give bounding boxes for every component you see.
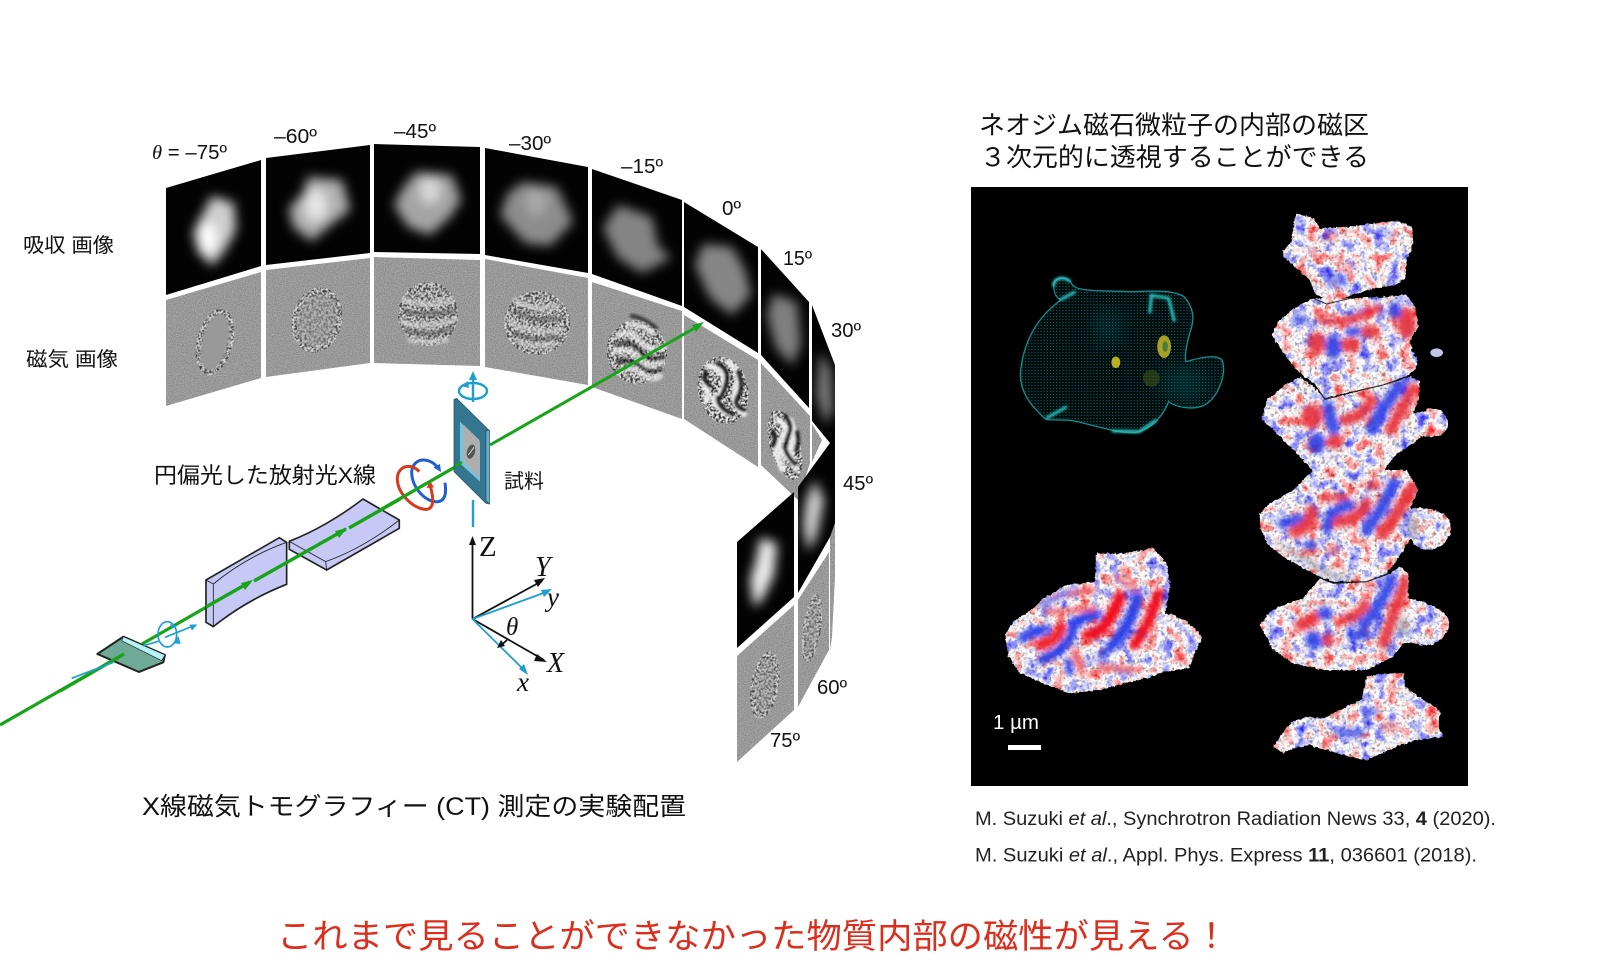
label: -45: –45º (394, 121, 437, 143)
blue helix (412, 460, 446, 502)
label: circularly polarized X-rays: 円偏光した放射光X線 (154, 463, 376, 488)
axis label x: x (516, 667, 529, 697)
absorption image strip (166, 144, 835, 537)
axis label Y: Y (535, 552, 554, 583)
citations (975, 809, 1496, 866)
label: 30: 30º (831, 320, 862, 342)
particle: cut-away view (1005, 548, 1202, 694)
particle: stacked slices (1259, 213, 1451, 760)
label: 60: 60º (817, 677, 848, 699)
sample holder (454, 398, 489, 504)
ball shading (1267, 515, 1418, 637)
label: 15: 15º (783, 248, 813, 270)
magnetic domain stripes (195, 289, 821, 712)
heading line 1: ネオジム磁石微粒子の内部の磁区 (979, 112, 1369, 140)
axis label theta: θ (506, 614, 518, 641)
row label: magnetic image: 磁気 画像 (26, 348, 118, 371)
optic: phase plate mirror (97, 637, 165, 672)
yellow inclusions (1111, 335, 1171, 387)
absorption panels lower (737, 443, 830, 648)
red helix (397, 466, 434, 509)
mirror / monochromator optics (97, 499, 399, 672)
axis label y: y (544, 582, 559, 612)
row label: absorption image: 吸収 画像 (23, 234, 114, 257)
scale label: 1 µm (993, 712, 1039, 734)
label: 45: 45º (843, 473, 874, 495)
axis Z (469, 536, 476, 619)
angle labels (152, 121, 874, 752)
optic: second focusing mirror (289, 499, 399, 570)
magnetic domain speckle (189, 282, 826, 721)
citation 1: M. Suzuki et al., Synchrotron Radiation News 33, 4 (2020). (975, 809, 1496, 830)
conclusion in red: これまで見ることができなかった物質内部の磁性が見える！ (277, 918, 1229, 956)
magnetic image strip (166, 257, 835, 762)
crack seams between slices (1313, 298, 1407, 583)
axis of sample rotation (459, 371, 487, 527)
x-ray beam (0, 322, 704, 725)
label: 75: 75º (770, 730, 801, 752)
scale bar (1008, 745, 1041, 750)
particle: cyan wireframe (1020, 278, 1224, 433)
citation 2: M. Suzuki et al., Appl. Phys. Express 11, 036601 (2018). (975, 846, 1477, 866)
heading: neodymium particle (979, 112, 1369, 172)
domain colours cut-away (1022, 577, 1158, 672)
label: -60: –60º (274, 126, 318, 148)
axis label Z: Z (479, 531, 497, 563)
magnetic panels: gray backgrounds (166, 257, 835, 762)
label: -30: –30º (509, 133, 552, 155)
domain colours lower slices (1282, 480, 1413, 738)
axis x cyan (472, 619, 528, 675)
optic: first focusing mirror (206, 538, 287, 627)
absorption panels: black backgrounds (166, 144, 835, 537)
domain colours upper slices (1292, 229, 1416, 454)
axis Y (472, 578, 545, 619)
label: -15: –15º (621, 156, 664, 178)
heading line 2: ３次元的に透視することができる (980, 144, 1369, 172)
panel: 3D magnetic domain image (971, 187, 1468, 786)
axis X (472, 619, 547, 662)
label: 0: 0º (722, 198, 742, 220)
black background (971, 187, 1468, 786)
circular polarization arrows (380, 460, 462, 510)
small fragment (1430, 348, 1443, 357)
title: experimental layout: X線磁気トモグラフィー (CT) 測定の実験配置 (142, 793, 686, 821)
beam through helix (380, 463, 462, 510)
axis y cyan (472, 589, 552, 619)
label: theta -75: θ = –75º (152, 142, 228, 164)
absorption blobs lower (750, 480, 824, 607)
panel: 45° to 75° return strip (737, 443, 830, 648)
theta arc (497, 640, 507, 648)
beam over mirrors (60, 499, 400, 691)
label: sample: 試料 (504, 470, 544, 493)
coordinate axes (469, 536, 552, 675)
axis label X: X (546, 648, 565, 679)
absorption particle blobs (193, 172, 801, 365)
cyan incoming beam and polarization ring (72, 622, 197, 678)
cyan highlights (1046, 278, 1174, 432)
absorption blob at 30 degrees (816, 352, 833, 425)
